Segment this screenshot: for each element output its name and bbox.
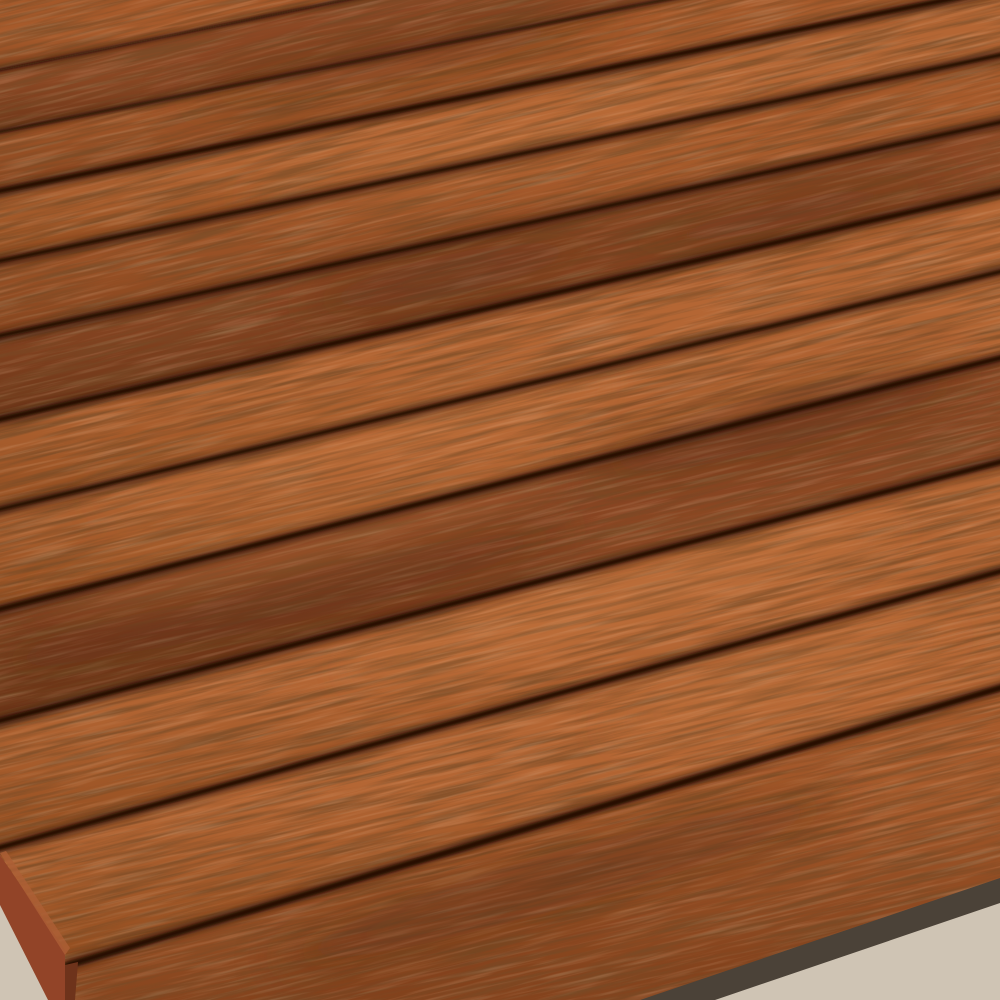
slat 8 (0, 272, 1000, 610)
slat 10 (0, 462, 1000, 848)
slat 11 (0, 572, 1000, 965)
slat 1 (0, 0, 345, 70)
slat 6 (0, 122, 1000, 420)
slat 7 (0, 192, 1000, 510)
slat 3 (0, 0, 950, 192)
slat 12 (65, 688, 1000, 1000)
slat 4 (0, 0, 1000, 262)
slat 2 (0, 0, 665, 132)
front plank end grain (0, 851, 70, 1000)
slat 5 (0, 55, 1000, 337)
plank shadow on ground (625, 876, 1000, 1000)
lower plank overlap at front (65, 962, 78, 1000)
slat 9 (0, 358, 1000, 722)
